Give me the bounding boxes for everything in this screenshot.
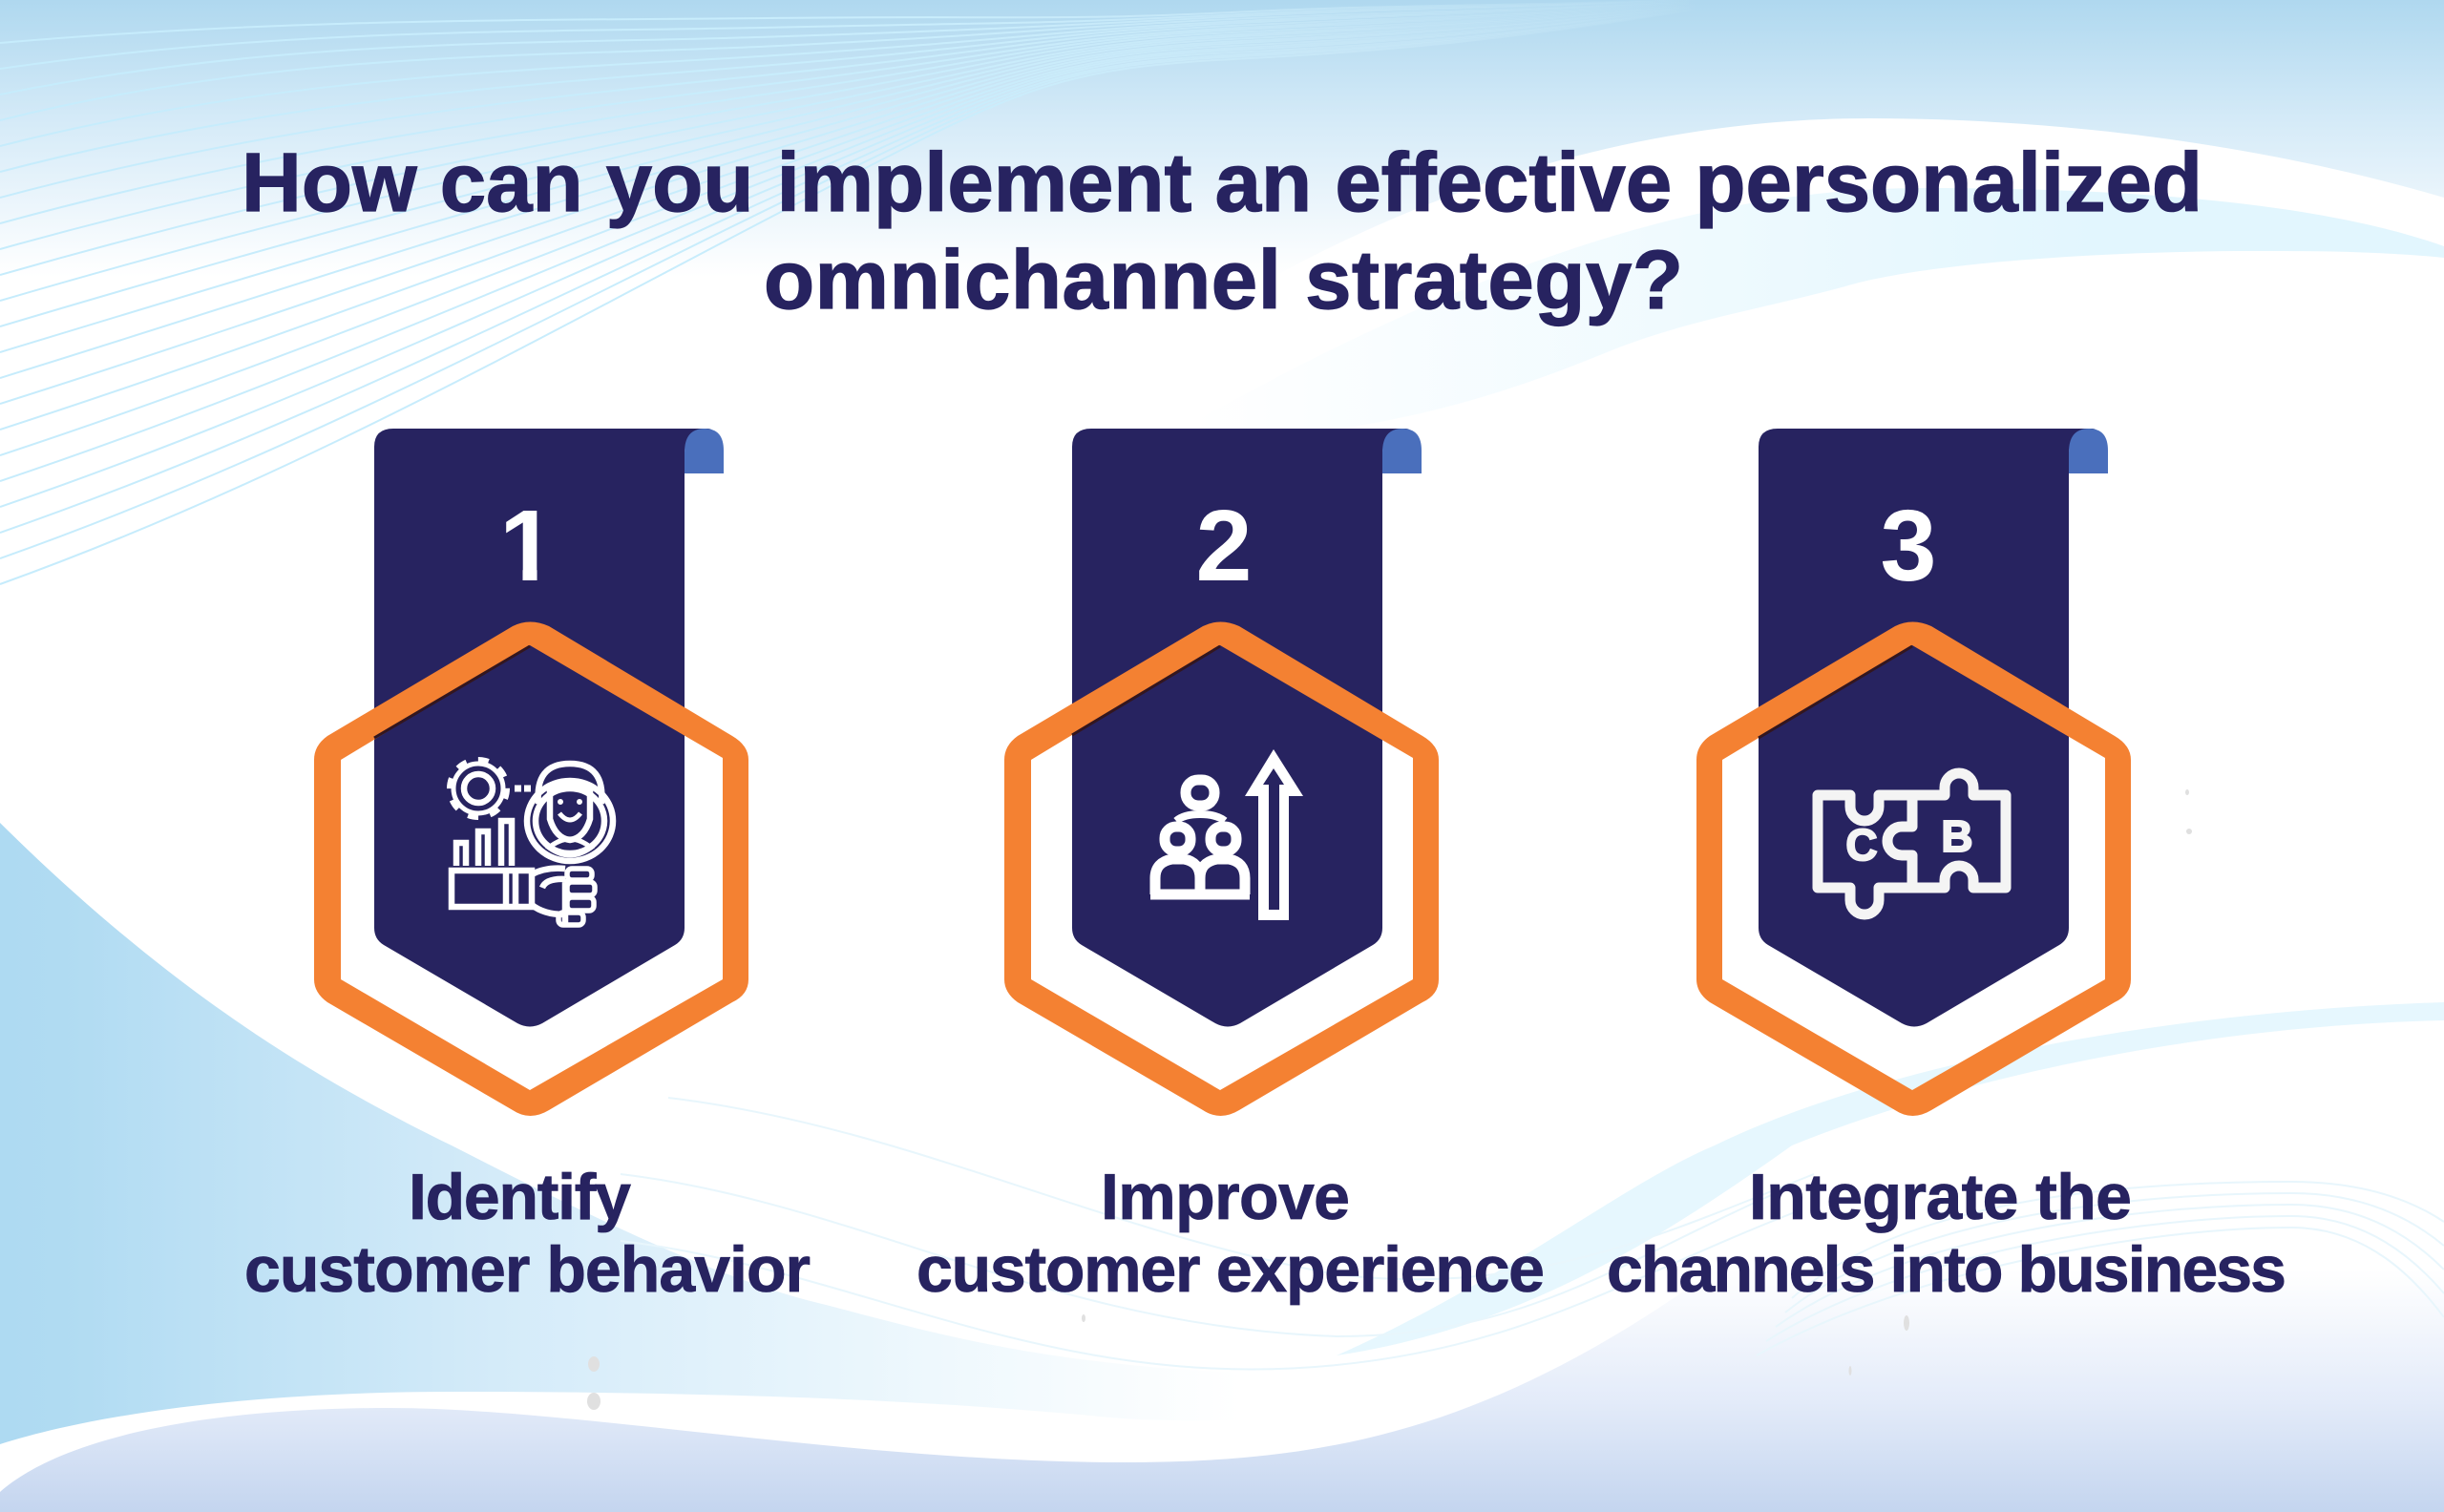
title: How can you implement an effective personalized [242, 136, 2202, 229]
number 3: 3 [1881, 490, 1936, 602]
ribbon 1 [374, 429, 724, 1027]
icon: puzzle pieces C and B: C [1845, 820, 1878, 870]
title [242, 136, 2202, 326]
label 1: customer behavior [244, 1233, 811, 1306]
ribbon 3 [1759, 429, 2108, 1027]
hexagon 2 [1004, 622, 1439, 1116]
ribbon 2 [1072, 429, 1422, 1027]
icon: customers and up arrow [1150, 749, 1303, 920]
label 3: channels into business [1607, 1233, 2286, 1306]
number 1: 1 [499, 490, 556, 602]
icon: puzzle pieces C and B: B [1941, 811, 1973, 861]
icon: puzzle pieces C and B [1818, 773, 2006, 914]
label 1: Identify [409, 1161, 631, 1233]
label 3: Integrate the [1749, 1161, 2132, 1233]
icon: gear, person magnifier and chart [450, 760, 613, 925]
label 2: Improve [1101, 1161, 1350, 1233]
label 2: customer experience [916, 1233, 1545, 1306]
label 1 [244, 1161, 811, 1306]
step 2 [916, 429, 1545, 1306]
label 2 [916, 1161, 1545, 1306]
label 3 [1607, 1161, 2286, 1306]
number 2: 2 [1196, 490, 1252, 602]
hexagon 3 [1696, 622, 2131, 1116]
step 3 [1607, 429, 2286, 1306]
step 1 [244, 429, 811, 1306]
hexagon 1 [314, 622, 748, 1116]
title: omnichannel strategy? [764, 234, 1683, 326]
